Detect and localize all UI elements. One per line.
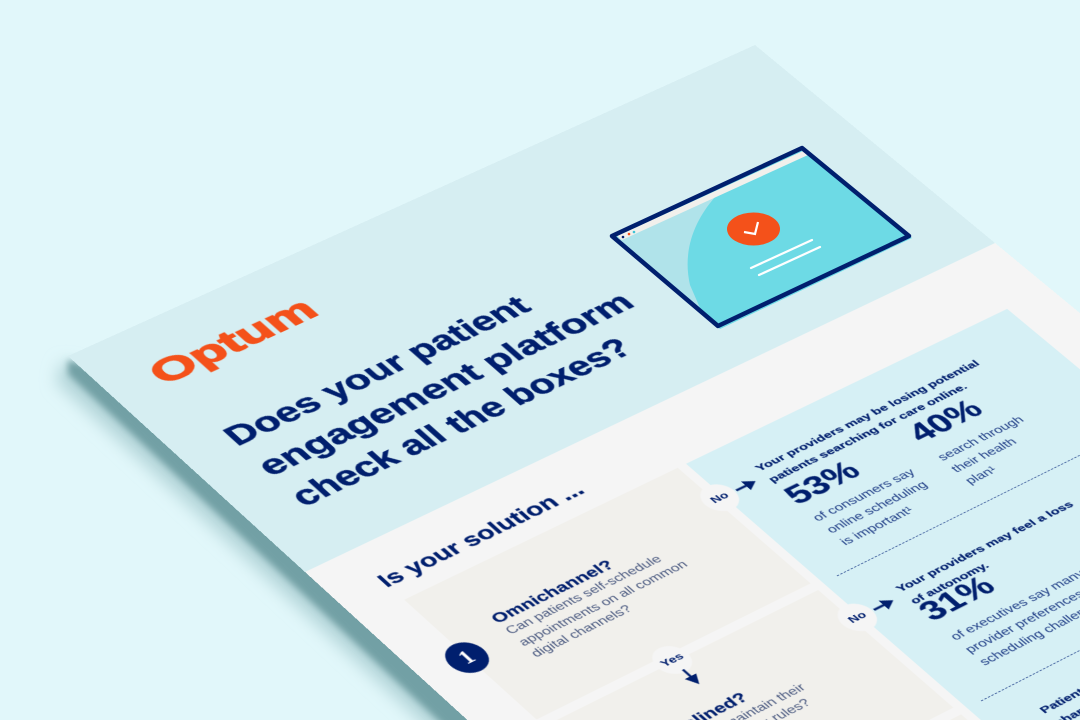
stat 53% caption xyxy=(810,466,931,548)
panel: question 1 omnichannel xyxy=(404,468,811,719)
panel: provider outcomes xyxy=(686,309,1080,720)
No label 1: No xyxy=(707,490,732,505)
browser outline xyxy=(612,148,909,326)
arrow: yes to question 2 xyxy=(681,668,700,684)
outcome 1 heading: Your providers may be losing potential xyxy=(752,358,982,473)
question 1 description: appointments on all common xyxy=(515,558,691,649)
browser address bar xyxy=(617,151,808,240)
text placeholder lines xyxy=(751,240,820,275)
stat 31%: 31% xyxy=(911,571,1003,627)
No label 2: No xyxy=(845,609,869,625)
outcome 2 heading: Your providers may feel a loss xyxy=(893,499,1076,594)
arrow: no to outcome 1 xyxy=(735,480,756,492)
stat 53%: 53% xyxy=(777,456,868,510)
title: check all the boxes? xyxy=(282,332,640,512)
title: Does your patient xyxy=(216,290,538,452)
outcome 1 heading: patients searching for care online. xyxy=(765,381,970,484)
outcome 2 heading: of autonomy. xyxy=(907,560,992,606)
stat 53% caption: is important¹ xyxy=(837,504,917,548)
stat 40% caption: plan¹ xyxy=(962,464,1000,487)
question 1 description: Can patients self-schedule xyxy=(502,553,665,637)
title: engagement platform xyxy=(249,287,642,482)
stat 40% caption xyxy=(934,414,1027,487)
browser screen xyxy=(612,148,909,326)
check badge xyxy=(727,212,780,246)
stat 53% caption: online scheduling xyxy=(823,479,931,536)
question 1 heading: Omnichannel? xyxy=(488,558,618,627)
light curved area xyxy=(617,197,715,308)
arrow: no to outcome 2 xyxy=(872,600,894,612)
Optum logo: Optum xyxy=(140,292,327,391)
stat 53% caption: of consumers say xyxy=(810,466,918,524)
stat 40%: 40% xyxy=(901,394,990,448)
No label 2 xyxy=(829,599,885,636)
browser dots xyxy=(622,231,635,238)
number badge 1: 1 xyxy=(452,646,481,669)
Yes label xyxy=(644,641,700,679)
stat 40% caption: search through xyxy=(934,414,1027,463)
section heading: Is your solution ... xyxy=(372,479,590,591)
Yes label: Yes xyxy=(657,651,687,669)
panel: question 3 xyxy=(686,714,1080,720)
panel: question 2 xyxy=(544,590,953,720)
header band xyxy=(68,45,995,572)
question 1 description: digital channels? xyxy=(528,603,635,660)
No label 1 xyxy=(692,479,747,516)
stat 40% caption: their health xyxy=(948,436,1020,475)
number badge 1 xyxy=(436,637,498,679)
